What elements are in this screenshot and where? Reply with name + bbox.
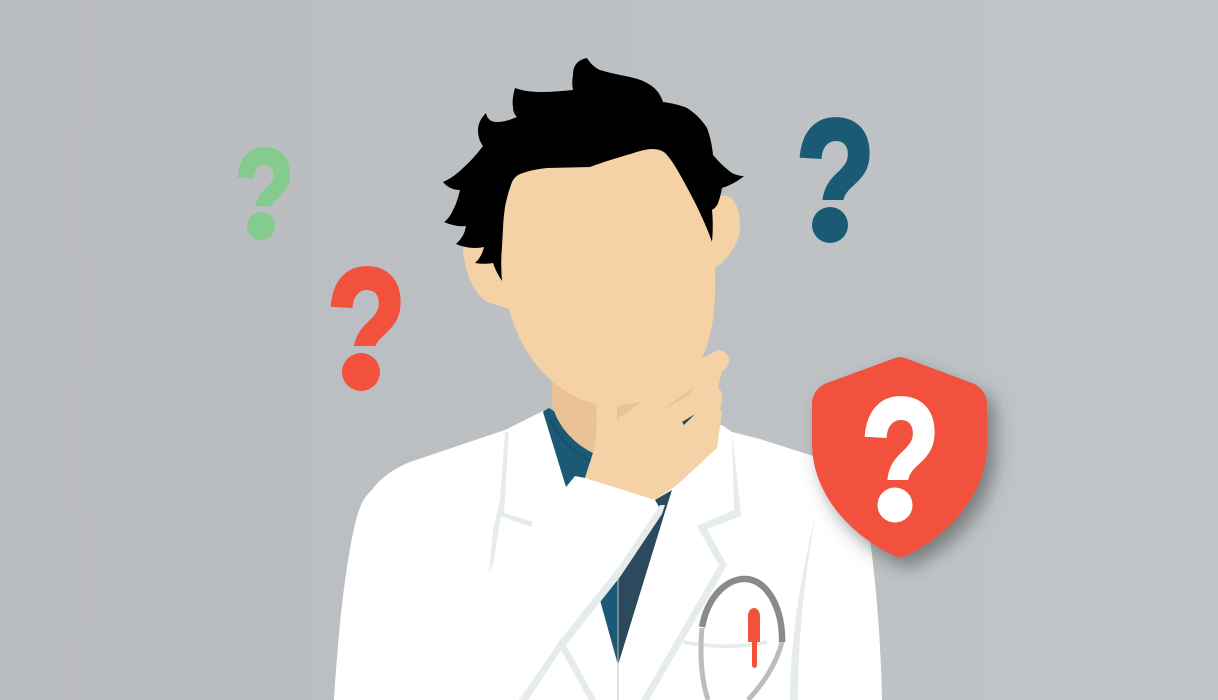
red pen [748,608,760,668]
neck [552,375,600,453]
white lab coat [334,411,882,700]
right ear [700,195,740,275]
shield question mark [864,396,935,522]
right lapel stripe [641,432,741,700]
green question mark [238,147,290,240]
shield with question mark [812,357,987,558]
stethoscope tube [701,628,782,700]
red question mark [330,266,401,391]
doctor figure [334,58,882,700]
dark tie [618,490,672,665]
teal shirt collar [543,408,600,487]
pocket line [683,642,767,646]
right coat seam [790,518,815,700]
teal tie [600,577,618,665]
shield question mark: ? [861,365,940,555]
stethoscope dark arc [702,579,782,642]
red question mark: ? [327,235,406,425]
illustration: doctor with question marks [238,58,1004,700]
green question mark: ? [235,123,294,265]
hand on chin [585,350,729,500]
shield [812,357,987,558]
blue question mark: ? [796,86,875,276]
button line [617,577,619,700]
hair [443,58,744,281]
finger gap [682,414,695,425]
left lapel stripe [519,505,665,700]
finger shading [617,387,693,421]
lower left collar stripe [489,432,533,573]
left ear [463,240,520,312]
collar shading [551,420,591,461]
blue question mark [800,117,870,243]
face [501,149,715,406]
